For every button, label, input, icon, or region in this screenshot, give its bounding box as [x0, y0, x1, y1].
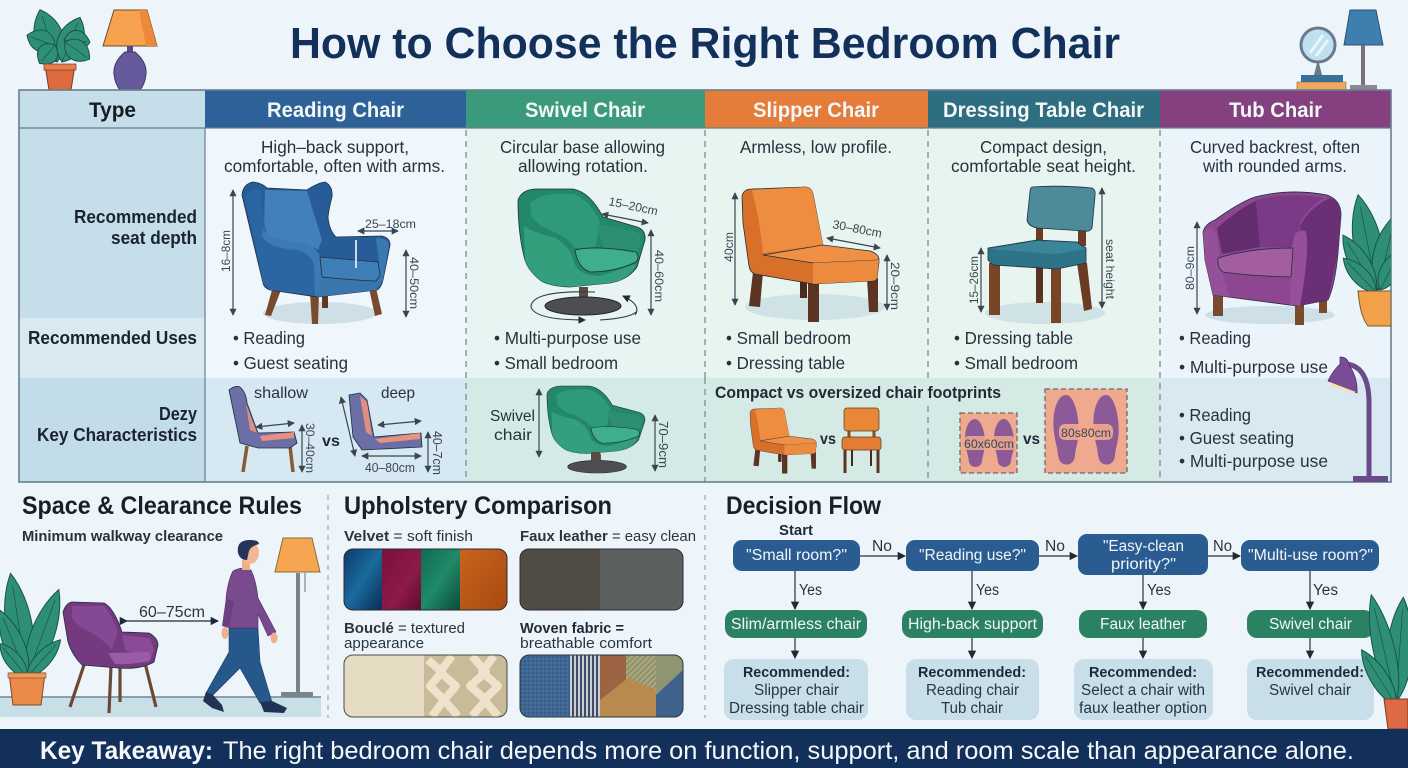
description: tub chair — [1190, 137, 1360, 176]
icon: table lamp top right — [1344, 10, 1383, 90]
section: upholstery comparison — [344, 492, 696, 717]
recommendation: faux leather option — [1074, 659, 1213, 720]
comparison: shallow vs deep seat: 40–80cm — [365, 461, 415, 475]
heading: Decision Flow — [726, 492, 881, 520]
list: reading chair uses: • Guest seating — [233, 353, 348, 373]
illustration: slipper chair — [722, 187, 902, 322]
list: slipper chair uses: • Dressing table — [726, 353, 845, 373]
list: swivel chair uses: • Small bedroom — [494, 353, 618, 373]
row label: Recommended seat depth: Recommended — [74, 207, 197, 227]
question: easy-clean priority: "Easy-clean — [1103, 538, 1184, 555]
comparison: 80x80 footprint: 80s80cm — [1061, 426, 1111, 440]
swatch: velvet — [344, 549, 507, 610]
illustration: floor lamp — [275, 538, 320, 697]
description: reading chair: comfortable, often with arms. — [224, 156, 445, 176]
comparison: compact vs oversized chairs: vs — [820, 431, 836, 448]
recommendation: reading and tub chair: Reading chair — [926, 682, 1019, 699]
illustration: slipper chair: 30–80cm — [831, 217, 883, 240]
question: small room: "Small room?" — [746, 547, 847, 564]
comparison: swivel chair: chair — [494, 427, 532, 444]
list: tub chair characteristics: • Multi-purpose use — [1179, 451, 1328, 471]
header: Reading Chair: Reading Chair — [267, 98, 405, 122]
description: dressing table chair: Compact design, — [980, 137, 1107, 157]
list: tub chair uses: • Multi-purpose use — [1179, 357, 1328, 377]
icon: plant beside tub chair — [1342, 194, 1391, 326]
comparison: shallow vs deep seat: 40–7cm — [430, 431, 444, 475]
swatch: faux leather — [520, 549, 683, 610]
icon: potted plant top left — [23, 5, 95, 90]
section: space and clearance rules — [0, 492, 321, 717]
question: small room — [733, 540, 860, 571]
header: Dressing Table Chair: Dressing Table Chair — [943, 98, 1145, 122]
header: Tub Chair — [1160, 90, 1391, 128]
list: tub chair uses — [1179, 328, 1328, 377]
comparison: 80x80 footprint — [1045, 389, 1127, 473]
header: Reading Chair — [205, 90, 466, 128]
comparison: swivel chair: 70–9cm — [656, 421, 670, 468]
subheading: Minimum walkway clearance — [22, 528, 223, 545]
heading: Space & Clearance Rules — [22, 492, 302, 520]
illustration: swivel chair — [518, 189, 666, 320]
description: tub chair: with rounded arms. — [1202, 156, 1347, 176]
recommendation: swivel chair — [1247, 659, 1374, 720]
illustration: reading chair: 25–18cm — [365, 217, 416, 231]
question: multi-use room: "Multi-use room?" — [1248, 547, 1373, 564]
list: dressing table chair uses — [954, 328, 1078, 373]
comparison: shallow vs deep seat: deep — [381, 385, 415, 402]
comparison table — [19, 90, 1391, 482]
label: boucle — [344, 620, 465, 652]
recommendation: faux leather option: faux leather option — [1079, 700, 1207, 717]
header: Slipper Chair: Slipper Chair — [753, 98, 880, 122]
illustration: dressing table chair — [967, 186, 1117, 324]
result: faux leather: Faux leather — [1100, 616, 1186, 633]
labels: No: No — [1213, 538, 1232, 555]
list: slipper chair uses: • Small bedroom — [726, 328, 851, 348]
illustration: tub chair: 80–9cm — [1183, 246, 1197, 290]
label: boucle: appearance — [344, 635, 424, 652]
description: swivel chair — [500, 137, 665, 176]
illustration: slipper chair: 40cm — [722, 232, 736, 262]
result: high-back support: High-back support — [908, 616, 1038, 633]
labels: Yes — [799, 582, 1338, 599]
illustration: reading chair: 40–50cm — [407, 257, 421, 309]
labels: Yes: Yes — [1313, 582, 1338, 599]
list: slipper chair uses — [726, 328, 851, 373]
comparison: shallow vs deep seat: 30–40cm — [303, 423, 317, 473]
comparison: 60x60 footprint — [960, 413, 1017, 473]
recommendation: slipper and dressing table chair: Dressing table chair — [729, 700, 864, 717]
comparison: shallow vs deep seat — [229, 385, 444, 475]
question: reading use: "Reading use?" — [919, 547, 1026, 564]
heading: compact vs oversized footprints: Compact vs oversized chair footprints — [715, 384, 1001, 402]
row label: Recommended seat depth: seat depth — [111, 228, 197, 248]
labels: Yes: Yes — [1147, 582, 1171, 599]
labels: Yes: Yes — [799, 582, 822, 599]
row label: Key Characteristics — [37, 404, 197, 445]
illustration: tub chair — [1183, 192, 1341, 325]
header: Slipper Chair — [705, 90, 928, 128]
question: easy-clean priority: priority?" — [1111, 556, 1176, 573]
recommendation: reading and tub chair — [906, 659, 1039, 720]
illustration: reading chair — [219, 182, 421, 324]
list: dressing table chair uses: • Dressing table — [954, 328, 1073, 348]
recommendation: slipper and dressing table chair — [724, 659, 868, 720]
label: woven fabric — [520, 620, 653, 652]
swatch: woven fabric — [520, 655, 683, 717]
row label: Key Characteristics: Key Characteristics — [37, 425, 197, 445]
header: Tub Chair: Tub Chair — [1229, 98, 1323, 122]
result: slim armless chair — [725, 610, 867, 638]
title: How to Choose the Right Bedroom Chair — [290, 19, 1120, 68]
header: Type — [19, 90, 205, 128]
label: start: Start — [779, 523, 813, 539]
result: high-back support — [902, 610, 1043, 638]
recommendation: slipper and dressing table chair: Recommended: — [743, 664, 850, 681]
key takeaway banner: Key Takeaway: — [40, 737, 213, 765]
illustration: dressing table chair: 15–26cm — [967, 256, 981, 304]
comparison: 60x60 footprint: 60x60cm — [964, 437, 1014, 451]
list: tub chair characteristics: • Reading — [1179, 405, 1251, 425]
key takeaway banner: The right bedroom chair depends more on function, support, and room scale than appearance alone. — [223, 737, 1354, 765]
description: slipper chair: Armless, low profile. — [740, 137, 892, 157]
recommendation: slipper and dressing table chair: Slipper chair — [754, 682, 839, 699]
label: woven fabric: Woven fabric = — [520, 620, 624, 637]
header: Dressing Table Chair — [928, 90, 1160, 128]
arrows — [795, 556, 1310, 658]
description: reading chair: High–back support, — [261, 137, 409, 157]
list: reading chair uses: • Reading — [233, 328, 305, 348]
clearance dimension: 60–75cm — [139, 604, 205, 621]
recommendation: reading and tub chair: Recommended: — [918, 664, 1026, 681]
list: dressing table chair uses: • Small bedroom — [954, 353, 1078, 373]
description: dressing table chair: comfortable seat height. — [951, 156, 1136, 176]
table column backgrounds — [19, 128, 1391, 482]
comparison: compact vs oversized chairs — [750, 408, 881, 473]
header: Swivel Chair — [466, 90, 705, 128]
labels: No — [872, 538, 1232, 555]
illustration: dressing table chair: seat height — [1103, 239, 1117, 300]
row label: Recommended seat depth — [74, 207, 197, 248]
list: swivel chair uses: • Multi-purpose use — [494, 328, 641, 348]
recommendation: swivel chair: Swivel chair — [1269, 682, 1351, 699]
section: decision flow — [724, 492, 1379, 720]
illustration: purple chair — [63, 602, 158, 713]
illustration: slipper chair: 20–9cm — [888, 262, 902, 310]
recommendation: faux leather option: Recommended: — [1089, 664, 1197, 681]
icon: floor lamp in tub chair column — [1328, 357, 1388, 482]
labels: Yes: Yes — [976, 582, 999, 599]
icon: potted plant bottom right — [1354, 592, 1408, 729]
label: velvet: Velvet = soft finish — [344, 528, 473, 545]
labels: No: No — [872, 538, 892, 555]
recommendation: reading and tub chair: Tub chair — [941, 700, 1003, 717]
description: swivel chair: Circular base allowing — [500, 137, 665, 157]
comparison: swivel chair: Swivel — [490, 408, 535, 425]
icon: table lamp top left — [103, 10, 157, 90]
key takeaway banner — [0, 729, 1408, 768]
row label: Recommended Uses: Recommended Uses — [28, 328, 197, 348]
label: woven fabric: breathable comfort — [520, 635, 653, 652]
labels: No: No — [1045, 538, 1065, 555]
recommendation: faux leather option: Select a chair with — [1081, 682, 1205, 699]
header: Swivel Chair: Swivel Chair — [525, 98, 646, 122]
result: slim armless chair: Slim/armless chair — [731, 616, 861, 633]
comparison: swivel chair — [490, 386, 670, 473]
icon: mirror and books top right — [1297, 28, 1346, 90]
recommendation: swivel chair: Recommended: — [1256, 664, 1364, 681]
list: tub chair uses: • Reading — [1179, 328, 1251, 348]
floor — [0, 697, 321, 717]
result: swivel chair: Swivel chair — [1269, 616, 1352, 633]
heading: Upholstery Comparison — [344, 492, 612, 520]
description: tub chair: Curved backrest, often — [1190, 137, 1360, 157]
list: swivel chair uses — [494, 328, 641, 373]
result: faux leather — [1079, 610, 1207, 638]
swatch: boucle — [344, 655, 507, 717]
illustration: reading chair: 16–8cm — [219, 230, 233, 272]
description: swivel chair: allowing rotation. — [518, 156, 648, 176]
question: easy-clean priority — [1078, 534, 1208, 575]
question: multi-use room — [1241, 540, 1379, 571]
header: Type: Type — [89, 98, 136, 122]
illustration: swivel chair: 40–60cm — [652, 250, 666, 302]
list: tub chair characteristics: • Guest seating — [1179, 428, 1294, 448]
description: reading chair — [224, 137, 445, 176]
result: swivel chair — [1247, 610, 1374, 638]
row label: Key Characteristics: Dezy — [159, 404, 197, 424]
list: tub chair characteristics — [1179, 405, 1328, 471]
label: faux leather: Faux leather = easy clean — [520, 528, 696, 545]
illustration: walking person — [203, 540, 287, 713]
description: dressing table chair — [951, 137, 1136, 176]
list: reading chair uses — [233, 328, 348, 373]
label: boucle: Bouclé = textured — [344, 620, 465, 637]
illustration: swivel chair: 15–20cm — [607, 194, 659, 218]
icon: potted plant — [0, 571, 70, 705]
label: vs: vs — [1023, 431, 1040, 448]
comparison: shallow vs deep seat: vs — [322, 433, 340, 450]
question: reading use — [906, 540, 1039, 571]
comparison: shallow vs deep seat: shallow — [254, 385, 308, 402]
